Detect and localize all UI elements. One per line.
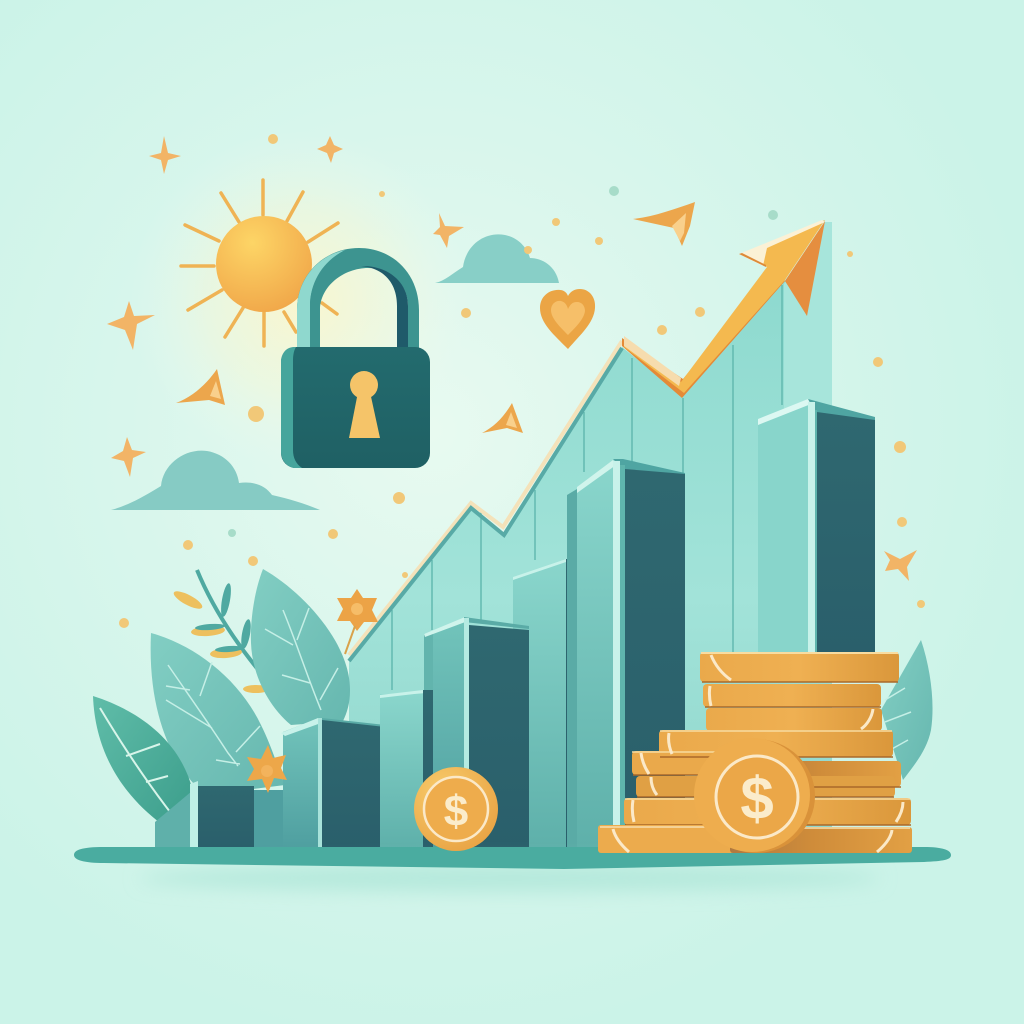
stack top (700, 652, 899, 731)
stack base (598, 825, 912, 853)
growth arrow (622, 220, 825, 398)
bar 6 (567, 459, 685, 848)
leaf: front green (93, 696, 198, 846)
bar chart (155, 399, 875, 848)
bar 5 (513, 559, 578, 848)
ground (74, 847, 951, 869)
paper dart: left (176, 369, 225, 405)
sun glow (130, 130, 470, 470)
leaf: small sprig (172, 570, 269, 693)
bar 3 (380, 690, 435, 848)
coin: large (694, 738, 815, 853)
paper dart: centre (482, 403, 523, 433)
bar 2 (254, 718, 386, 848)
icon: heart (540, 289, 595, 349)
coin stack (598, 652, 912, 853)
icon: sun (181, 180, 338, 346)
bar 1 (155, 781, 254, 848)
bar 7 (758, 399, 875, 652)
coin: small (414, 767, 498, 851)
leaf: back large (251, 569, 350, 725)
paper dart: top (633, 202, 695, 246)
icon: padlock (281, 248, 430, 468)
sparkles and stars (107, 136, 917, 581)
flower: upper (337, 589, 378, 654)
decorative dots (119, 134, 925, 628)
cloud: upper right (435, 234, 559, 283)
cloud: left (111, 451, 320, 510)
coin: small: $ (444, 787, 468, 836)
leaf: middle large (151, 633, 285, 795)
flower: lower (247, 745, 287, 793)
left foliage (93, 569, 378, 846)
ground shadow (140, 864, 880, 892)
keyhole (349, 371, 380, 438)
growth mountain chart (349, 222, 832, 848)
coin: large: $ (740, 765, 774, 832)
stack middle (624, 730, 911, 825)
right leaf (881, 640, 933, 780)
bar 4 (424, 617, 529, 848)
